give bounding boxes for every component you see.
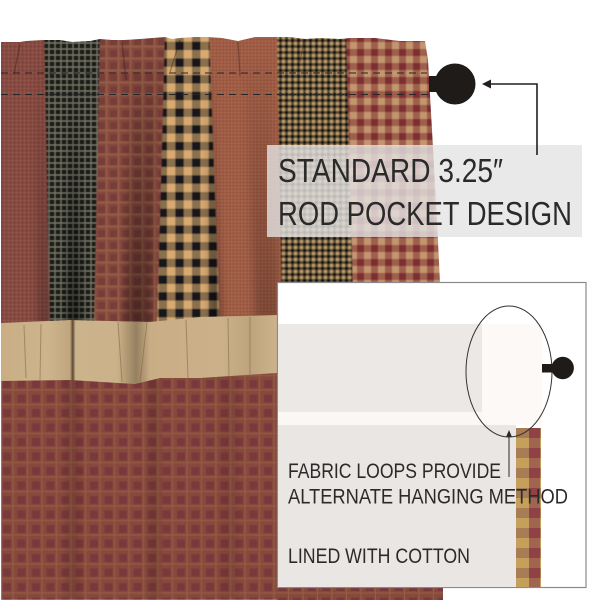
fold: red plaid right (125, 60, 160, 330)
callout: rod pocket label (267, 145, 582, 237)
fold: left strip edge (36, 120, 52, 322)
icon: small rod end (542, 357, 574, 379)
fold: right (220, 375, 236, 600)
upper stitch (1, 72, 427, 74)
curtain: lower plaid panel (1, 372, 443, 600)
strip: red fine check (0, 30, 50, 330)
arrow: text to loop (506, 430, 512, 477)
plaid field (1, 372, 278, 600)
fabric strips (0, 30, 445, 330)
inset text: fabric loops line 1: FABRIC LOOPS PROVIDE (288, 459, 501, 483)
curtain: patchwork upper panel (0, 30, 445, 330)
fold: centre (148, 375, 160, 600)
strip: tan and black check (157, 30, 222, 330)
stitching lines (1, 73, 430, 94)
lower fold shading (66, 378, 160, 600)
ruffle pleats (24, 317, 250, 382)
inset text: lined with cotton: LINED WITH COTTON (288, 544, 470, 568)
strip: rust check (209, 30, 284, 330)
ruffle band (1, 315, 277, 384)
label background (267, 145, 582, 237)
fold: dark strip centre (66, 80, 82, 330)
strip: small black check (276, 37, 354, 282)
strip: red and tan check (346, 38, 440, 282)
label line 1: STANDARD 3.25″ (278, 152, 503, 189)
icon: curtain rod end (429, 64, 476, 104)
gather creases (14, 40, 304, 80)
lining upper band (278, 324, 482, 412)
lower stitch (1, 94, 430, 96)
fold: left (66, 375, 80, 600)
loop ellipse (466, 306, 552, 437)
panel: inset lining detail (278, 282, 586, 588)
curtain edge plaid (516, 428, 541, 587)
fold shading (36, 80, 280, 322)
inset frame (278, 282, 586, 588)
fold: rust right (249, 104, 280, 316)
strip: black check (44, 30, 102, 330)
lining fold band (278, 412, 482, 425)
strip: red plaid (94, 30, 166, 330)
arrow: label to rod end (482, 80, 537, 155)
ruffle cloth (1, 315, 277, 384)
bottom edge strip (277, 587, 443, 600)
fold: tan check right edge (205, 60, 222, 330)
lining lighter loop area (482, 324, 542, 425)
lining lower panel (278, 425, 516, 587)
